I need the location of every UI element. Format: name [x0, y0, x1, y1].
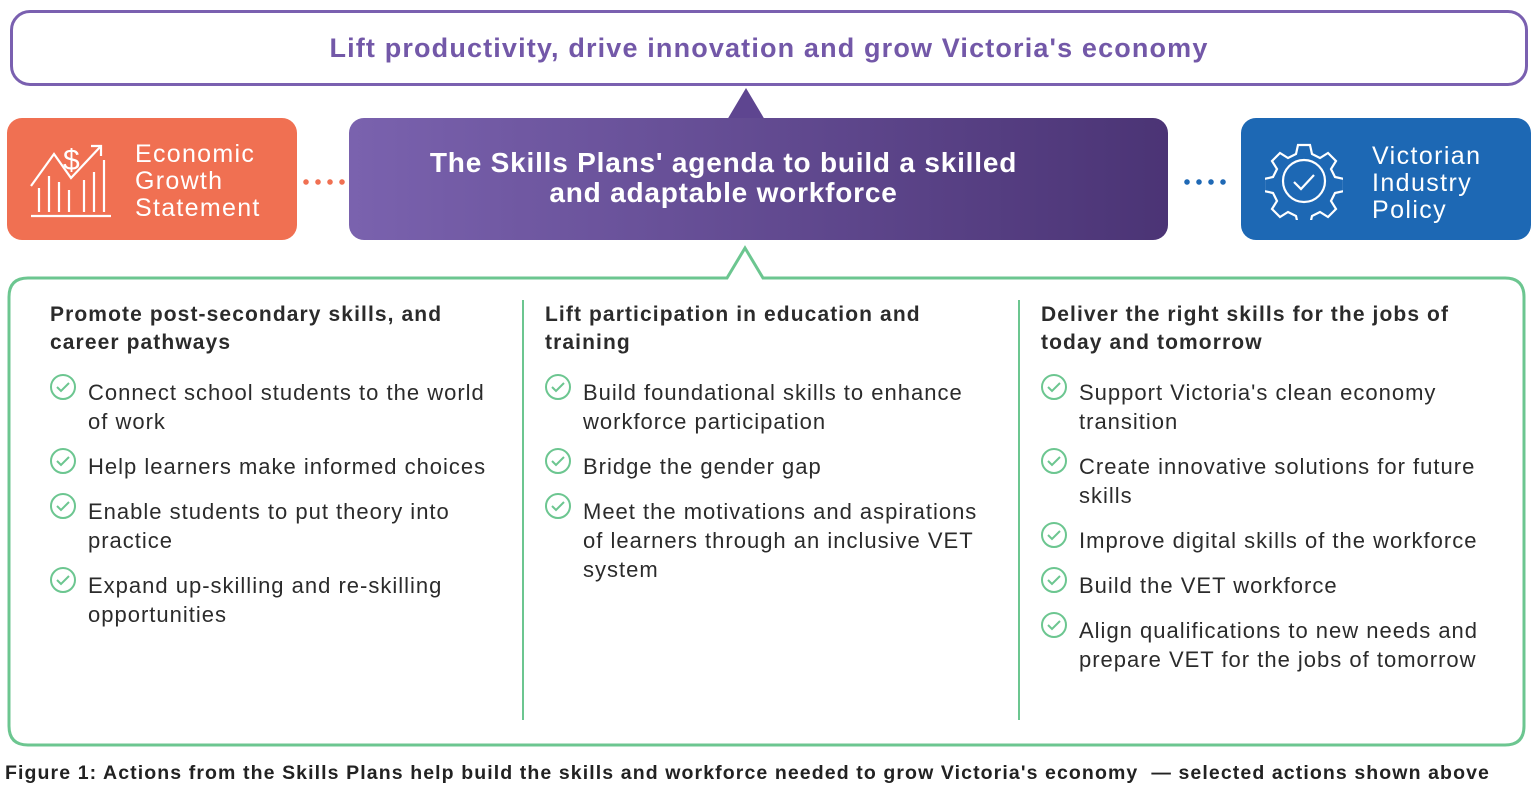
column 2: Build foundational skills to enhance	[583, 380, 963, 405]
column 1: career pathways	[50, 331, 231, 354]
column 3: Align qualifications to new needs and	[1079, 618, 1478, 643]
column 2: system	[583, 557, 659, 582]
column 3: Build the VET workforce	[1079, 573, 1338, 598]
column 3: skills	[1079, 483, 1133, 508]
column 3: Deliver the right skills for the jobs of	[1041, 303, 1449, 326]
column 2: workforce participation	[583, 409, 826, 434]
column 1: of work	[88, 409, 166, 434]
panel: Economic Growth Statement: Growth	[135, 167, 223, 195]
column 3: today and tomorrow	[1041, 331, 1263, 354]
panel: Economic Growth Statement: Statement	[135, 194, 261, 222]
column 1: Help learners make informed choices	[88, 454, 486, 479]
green frame with notch	[8, 245, 1526, 746]
column 1: Connect school students to the world	[88, 380, 485, 405]
column 1: Promote post-secondary skills, and	[50, 303, 442, 326]
icon: growth chart: $	[63, 144, 80, 177]
column 2	[545, 303, 977, 582]
column 2: Bridge the gender gap	[583, 454, 822, 479]
panel: Economic Growth Statement	[7, 118, 297, 240]
column 3: Improve digital skills of the workforce	[1079, 528, 1477, 553]
column 1: Enable students to put theory into	[88, 499, 450, 524]
icon: gear with check	[1265, 144, 1343, 220]
column 3: prepare VET for the jobs of tomorrow	[1079, 647, 1477, 672]
panel: Economic Growth Statement: Economic	[135, 140, 255, 168]
connector dots blue	[1181, 178, 1229, 186]
panel: Skills Plans agenda	[349, 118, 1168, 240]
column 3	[1041, 303, 1478, 672]
column 3: Create innovative solutions for future	[1079, 454, 1475, 479]
column 2: training	[545, 331, 631, 354]
arrow: up triangle	[728, 88, 764, 118]
caption: Figure 1: Actions from the Skills Plans help build the skills and workforce needed to grow Victoria's economy — selected actions shown above	[5, 762, 1490, 784]
column 3: transition	[1079, 409, 1178, 434]
top goal box: Lift productivity, drive innovation and grow Victoria's economy	[330, 32, 1208, 62]
panel: Skills Plans agenda: and adaptable workforce	[549, 177, 898, 208]
panel: Victorian Industry Policy: Industry	[1372, 169, 1472, 197]
column 3: Support Victoria's clean economy	[1079, 380, 1436, 405]
column 1: Expand up-skilling and re-skilling	[88, 573, 442, 598]
icon: growth chart	[30, 144, 111, 218]
column 2: of learners through an inclusive VET	[583, 528, 974, 553]
panel: Skills Plans agenda: The Skills Plans' agenda to build a skilled	[430, 147, 1017, 178]
connector dots orange	[300, 178, 348, 186]
top goal box	[10, 10, 1528, 86]
column 2: Lift participation in education and	[545, 303, 921, 326]
column 1	[50, 303, 486, 627]
column 1: practice	[88, 528, 173, 553]
panel: Victorian Industry Policy	[1241, 118, 1531, 240]
panel: Victorian Industry Policy: Victorian	[1372, 142, 1481, 170]
panel: Victorian Industry Policy: Policy	[1372, 196, 1447, 224]
dividers	[522, 300, 524, 720]
column 1: opportunities	[88, 602, 227, 627]
column 2: Meet the motivations and aspirations	[583, 499, 977, 524]
